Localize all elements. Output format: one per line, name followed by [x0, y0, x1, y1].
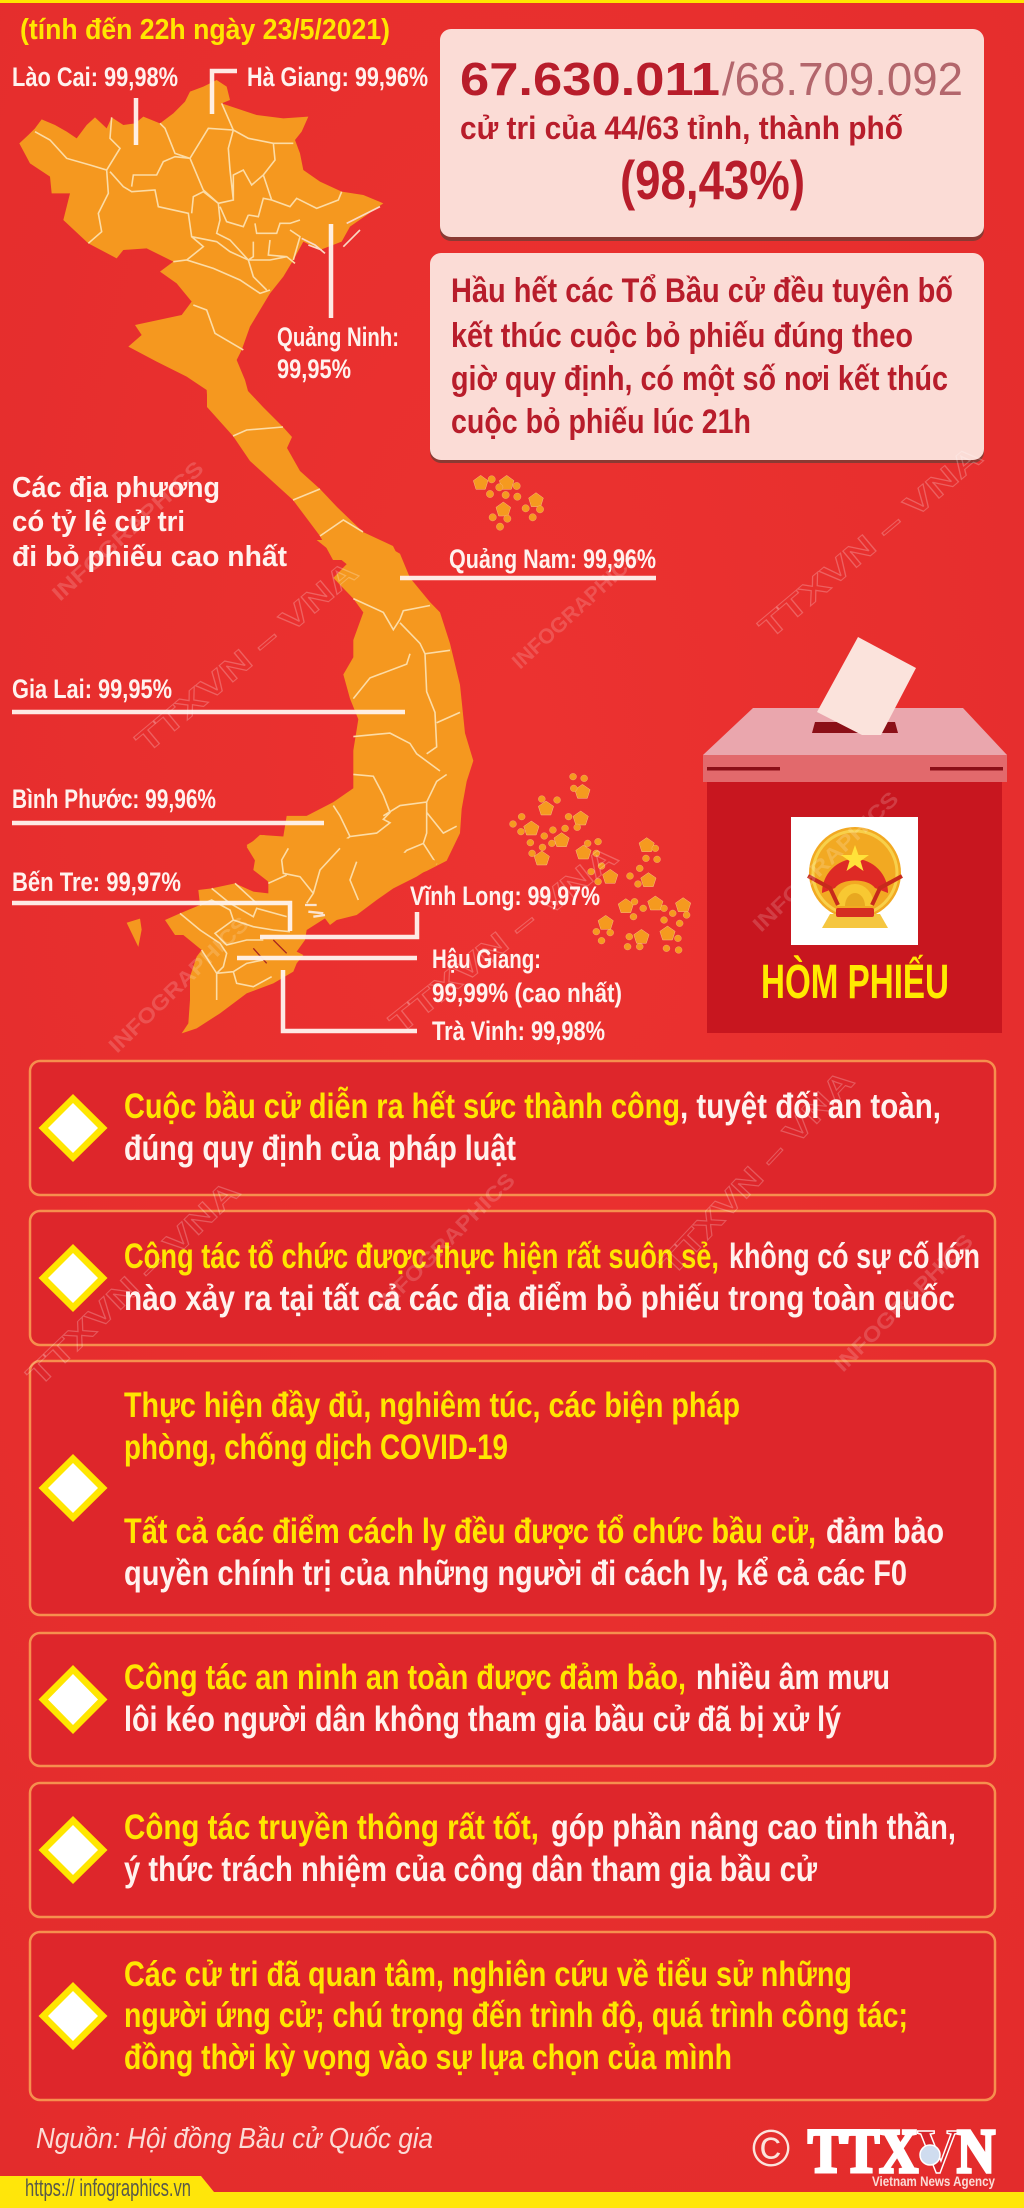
icon: ballot box	[703, 637, 1007, 1033]
panel: row 6: đồng thời kỳ vọng vào sự lựa chọn của mình	[124, 2038, 732, 2077]
province labels: Lào Cai: 99,98%	[12, 62, 178, 92]
province labels: Gia Lai: 99,95%	[12, 674, 172, 704]
icon: diamond bullet	[38, 1454, 108, 1522]
panel: row 1: Cuộc bầu cử diễn ra hết sức thành công	[124, 1086, 680, 1126]
panel: row 5: Công tác truyền thông rất tốt,	[124, 1808, 539, 1847]
map: southern part	[127, 540, 473, 947]
panel: row 4: Công tác an ninh an toàn được đảm bảo,	[124, 1658, 686, 1697]
ballot box body	[707, 782, 1002, 1033]
panel: row 3: Thực hiện đầy đủ, nghiêm túc, các biện pháp	[124, 1386, 740, 1425]
watermarks: INFOGRAPHICS	[749, 787, 903, 937]
footer: yellow website tab	[0, 2175, 1024, 2208]
panel: turnout figure: (98,43%)	[620, 149, 805, 211]
panel: row 2: Công tác tổ chức được thực hiện rất suôn sẻ,	[124, 1237, 719, 1276]
panel: row 6	[30, 1932, 995, 2100]
province labels: Vĩnh Long: 99,97%	[410, 881, 600, 911]
watermarks: TTXVN – VNA	[129, 554, 364, 759]
watermarks: INFOGRAPHICS	[372, 1169, 520, 1316]
copyright symbol: ©	[752, 2120, 790, 2178]
map heading: đi bỏ phiếu cao nhất	[12, 541, 287, 573]
footer: yellow website tab: https:// infographics.vn	[25, 2175, 191, 2202]
ballot slot	[812, 722, 898, 733]
panel: row 3: đảm bảo	[826, 1512, 944, 1551]
icon: diamond bullet	[38, 1094, 108, 1162]
watermarks	[20, 439, 989, 1393]
panel: row 2	[30, 1211, 995, 1345]
ballot box lid band	[703, 755, 1007, 782]
emblem card	[791, 817, 918, 945]
map: Mekong delta	[165, 827, 440, 1033]
province labels: Quảng Ninh:	[277, 322, 399, 352]
panel: row 1: , tuyệt đối an toàn,	[680, 1087, 941, 1126]
leader lines	[12, 71, 656, 1031]
panel: row 4: nhiều âm mưu	[696, 1658, 890, 1697]
icon: national emblem	[808, 827, 902, 928]
panel: row 3: Tất cả các điểm cách ly đều được tổ chức bầu cử,	[124, 1512, 816, 1551]
panel: closing time note: Hầu hết các Tổ Bầu cử đều tuyên bố	[451, 272, 953, 310]
watermarks: INFOGRAPHICS	[48, 457, 208, 606]
province labels: Trà Vinh: 99,98%	[432, 1016, 605, 1046]
icon: diamond bullet	[38, 1982, 108, 2050]
panel: row 1	[30, 1061, 995, 1195]
ballot paper	[817, 637, 916, 735]
panel: row 4: lôi kéo người dân không tham gia bầu cử đã bị xử lý	[124, 1700, 841, 1739]
panel: turnout figure: /68.709.092	[722, 53, 963, 105]
map: northern and central part	[19, 80, 400, 560]
panel: row 4	[30, 1633, 995, 1766]
islands: Hoàng Sa	[473, 475, 544, 530]
panel: turnout figure: cử tri của 44/63 tỉnh, thành phố	[460, 110, 903, 146]
map heading: có tỷ lệ cử tri	[12, 506, 185, 538]
logo: TTXVN: Vietnam News Agency	[872, 2173, 995, 2189]
map of Vietnam	[19, 80, 473, 1033]
logo: TTXVN: N	[957, 2118, 995, 2186]
panel: row 3	[30, 1361, 995, 1615]
logo: TTXVN: TTX	[808, 2118, 918, 2186]
panel: closing time note	[430, 253, 984, 463]
panel: closing time note: cuộc bỏ phiếu lúc 21h	[451, 403, 751, 441]
province labels: Quảng Nam: 99,96%	[449, 544, 656, 574]
province labels	[12, 62, 656, 1046]
province labels: 99,95%	[277, 354, 351, 384]
watermarks: TTXVN – VNA	[383, 838, 624, 1040]
map heading	[12, 472, 287, 573]
province labels: Hà Giang: 99,96%	[247, 62, 428, 92]
panel: row 5	[30, 1783, 995, 1917]
panel: turnout figure: 67.630.011	[460, 53, 720, 105]
panel: turnout figure	[440, 29, 984, 241]
panel: row 6: Các cử tri đã quan tâm, nghiên cứu về tiểu sử những	[124, 1955, 852, 1994]
logo: TTXVN	[808, 2118, 995, 2189]
map heading: Các địa phương	[12, 472, 220, 504]
panel: row 5: ý thức trách nhiệm của công dân tham gia bầu cử	[124, 1850, 818, 1889]
watermarks: INFOGRAPHICS	[508, 547, 644, 674]
watermarks: TTXVN – VNA	[653, 1063, 861, 1282]
watermarks: INFOGRAPHICS	[830, 1230, 978, 1377]
watermarks: TTXVN – VNA	[20, 1173, 247, 1393]
province labels: Hậu Giang:	[432, 944, 541, 974]
logo: TTXVN: V	[917, 2118, 959, 2186]
top yellow strip	[0, 0, 1024, 3]
province labels: Bình Phước: 99,96%	[12, 784, 216, 814]
panel: closing time note: giờ quy định, có một số nơi kết thúc	[451, 360, 948, 398]
subtitle: date: (tính đến 22h ngày 23/5/2021)	[20, 14, 390, 46]
ballot box lid top	[703, 708, 1007, 755]
province labels: Bến Tre: 99,97%	[12, 867, 181, 897]
source note: Nguồn: Hội đồng Bầu cử Quốc gia	[36, 2123, 433, 2155]
panel: row 3: phòng, chống dịch COVID-19	[124, 1428, 508, 1467]
icon: diamond bullet	[38, 1244, 108, 1312]
panel: row 1: đúng quy định của pháp luật	[124, 1129, 516, 1168]
islands: Trường Sa	[510, 773, 691, 953]
icon: diamond bullet	[38, 1665, 108, 1734]
icon: diamond bullet	[38, 1816, 108, 1884]
watermarks: TTXVN – VNA	[752, 439, 989, 645]
province labels: 99,99% (cao nhất)	[432, 978, 622, 1008]
watermarks: INFOGRAPHICS	[104, 913, 254, 1058]
panel: closing time note: kết thúc cuộc bỏ phiếu đúng theo	[451, 317, 913, 355]
